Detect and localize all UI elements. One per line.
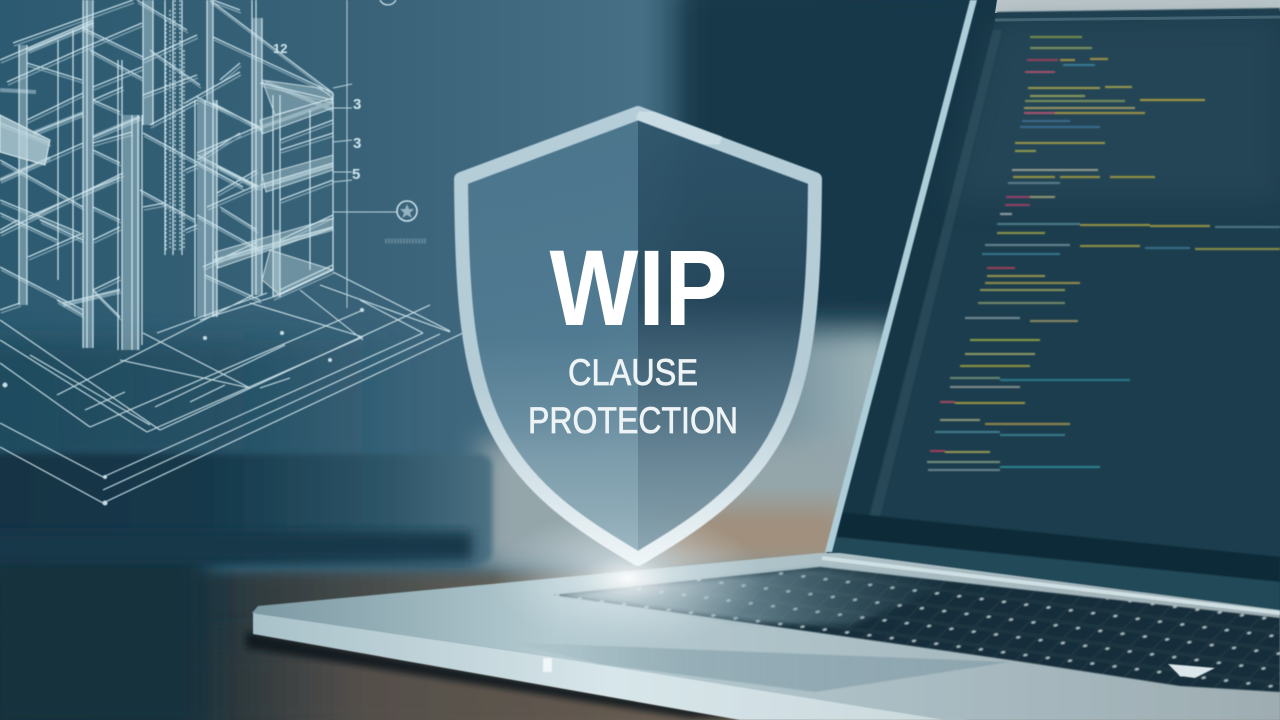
dimension marks: 5 bbox=[352, 166, 360, 183]
screen top strip bbox=[995, 0, 1280, 13]
concrete slab at left edge bbox=[0, 115, 50, 165]
floor beams bbox=[0, 0, 333, 317]
keyboard bbox=[553, 567, 1280, 692]
shield subheading line 1: CLAUSE bbox=[568, 352, 698, 393]
dimension marks: 3 bbox=[353, 135, 361, 152]
hinge band bbox=[826, 537, 1280, 612]
floor plan lines bbox=[0, 272, 463, 505]
shield subheading line 2: PROTECTION bbox=[528, 400, 738, 441]
shield right half bbox=[638, 113, 815, 559]
dimension marks bbox=[273, 41, 361, 183]
shield left half bbox=[461, 113, 638, 559]
dotted service shaft bbox=[166, 0, 184, 252]
glow under shield bbox=[493, 508, 763, 648]
laptop lid bbox=[825, 0, 1280, 620]
icon: star marker bbox=[380, 0, 417, 221]
dimension line bbox=[333, 0, 397, 308]
blueprint wireframe building bbox=[0, 0, 463, 505]
screen bbox=[996, 7, 1280, 13]
dimension marks: 12 bbox=[273, 41, 287, 56]
rear hinge highlight bbox=[822, 558, 1280, 613]
shield bbox=[461, 113, 815, 559]
laptop deck bbox=[252, 553, 1280, 720]
white key detail bbox=[1168, 664, 1215, 678]
shadow under laptop bbox=[246, 632, 745, 718]
shelf slabs on right wing bbox=[215, 80, 333, 295]
lid light edge bbox=[825, 0, 977, 552]
columns bbox=[19, 0, 333, 350]
faint drawing note bbox=[385, 238, 426, 244]
shield outline bbox=[461, 113, 815, 559]
column fills bbox=[19, 0, 280, 350]
keyboard reflection bbox=[553, 567, 960, 625]
laptop front edge bbox=[253, 612, 970, 720]
trackpad bbox=[556, 645, 1006, 692]
code on screen bbox=[927, 37, 1280, 470]
lower bezel bbox=[838, 512, 1280, 582]
shield top right highlight bbox=[638, 113, 720, 143]
screen gutter bbox=[870, 30, 1002, 517]
thick slab highlights bbox=[0, 23, 333, 305]
front notch highlight bbox=[543, 658, 552, 672]
screen top wash bbox=[982, 4, 1270, 178]
shield heading: WIP: WIP bbox=[550, 227, 728, 348]
offset beam copy bbox=[1, 3, 334, 320]
dimension marks: 3 bbox=[353, 96, 361, 113]
